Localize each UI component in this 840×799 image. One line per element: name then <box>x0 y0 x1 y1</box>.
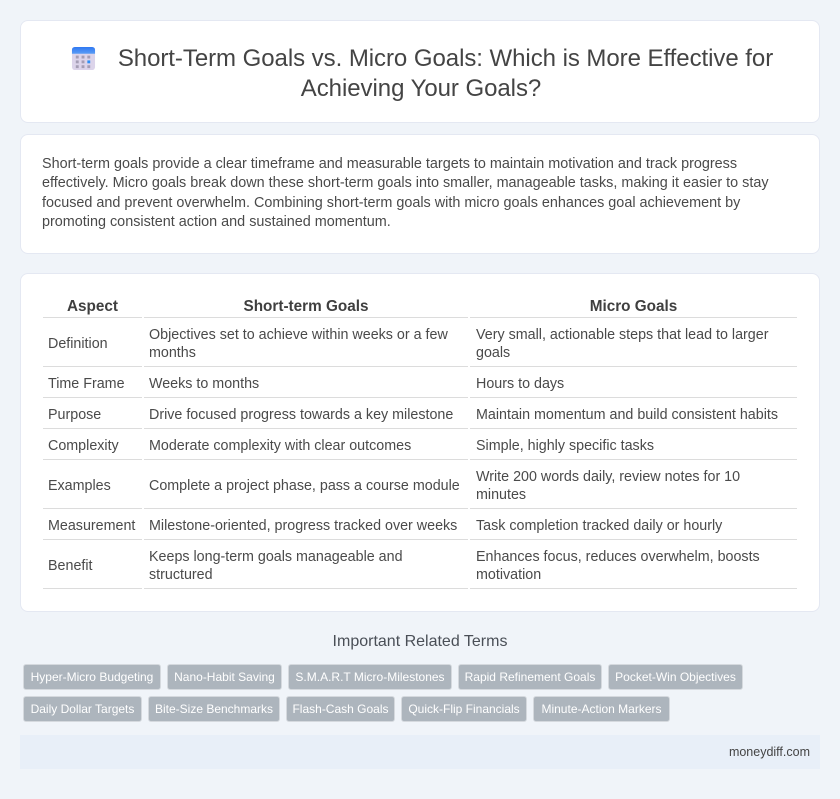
title: Short-Term Goals vs. Micro Goals: Which is More Effective for <box>118 45 773 72</box>
row: benefit: Keeps long-term goals manageable and <box>149 549 403 565</box>
tag: Pocket-Win Objectives <box>615 670 736 684</box>
tag <box>167 664 282 690</box>
row: definition: months <box>149 345 196 361</box>
tag <box>533 696 670 722</box>
row: definition: Very small, actionable steps that lead to larger <box>476 327 768 343</box>
table header <box>43 298 797 318</box>
row: time frame: Weeks to months <box>149 376 259 392</box>
tag: Quick-Flip Financials <box>408 702 520 716</box>
row: complexity: Moderate complexity with clear outcomes <box>149 438 411 454</box>
related term tags <box>23 664 743 722</box>
row: benefit: motivation <box>476 567 541 583</box>
tag: Bite-Size Benchmarks <box>155 702 273 716</box>
row: examples: minutes <box>476 487 526 503</box>
table header: Micro Goals <box>590 298 677 315</box>
row: purpose: Maintain momentum and build consistent habits <box>476 407 778 423</box>
intro text: effectively. Micro goals break down these short-term goals into smaller, manageable tasks, making it easier to stay <box>42 175 769 191</box>
title: Achieving Your Goals? <box>301 75 541 102</box>
row: purpose: Purpose <box>48 407 101 423</box>
row: examples: Examples <box>48 478 111 494</box>
tag: Rapid Refinement Goals <box>465 670 595 684</box>
tag: Minute-Action Markers <box>541 702 662 716</box>
tag <box>23 664 161 690</box>
row: benefit: structured <box>149 567 213 583</box>
panel: comparison table <box>20 273 820 612</box>
row: examples: Complete a project phase, pass a course module <box>149 478 460 494</box>
row: benefit: Benefit <box>48 558 93 574</box>
intro text: focused and prevent overwhelm. Combining short-term goals with micro goals enhances goal achievement by <box>42 195 740 211</box>
row: purpose: Drive focused progress towards a key milestone <box>149 407 453 423</box>
tag <box>23 696 142 722</box>
row: definition: Definition <box>48 336 108 352</box>
intro text: Short-term goals provide a clear timeframe and measurable targets to maintain motivation and track progress <box>42 156 737 172</box>
icon: calendar <box>72 47 96 70</box>
tag: Flash-Cash Goals <box>292 702 389 716</box>
intro text <box>42 156 769 230</box>
row: complexity <box>43 438 797 460</box>
heading: important related terms: Important Related Terms <box>333 633 507 650</box>
title <box>118 45 773 102</box>
tag: Hyper-Micro Budgeting <box>31 670 153 684</box>
row: time frame <box>43 376 797 398</box>
row: definition: goals <box>476 345 510 361</box>
row: complexity: Complexity <box>48 438 119 454</box>
header panel <box>20 20 820 123</box>
row: complexity: Simple, highly specific tasks <box>476 438 654 454</box>
row: examples: Write 200 words daily, review notes for 10 <box>476 469 740 485</box>
table header: Aspect <box>67 298 118 315</box>
tag <box>401 696 527 722</box>
row: measurement: Milestone-oriented, progress tracked over weeks <box>149 518 457 534</box>
row: definition: Objectives set to achieve within weeks or a few <box>149 327 448 343</box>
row: time frame: Time Frame <box>48 376 125 392</box>
footer bar <box>20 735 820 769</box>
tag: Nano-Habit Saving <box>174 670 275 684</box>
row: examples <box>43 469 797 509</box>
tag <box>288 664 452 690</box>
row: purpose <box>43 407 797 429</box>
tag <box>148 696 280 722</box>
row: benefit: Enhances focus, reduces overwhelm, boosts <box>476 549 760 565</box>
tag: Daily Dollar Targets <box>31 702 134 716</box>
row: definition <box>43 327 797 367</box>
tag <box>608 664 743 690</box>
row: measurement: Measurement <box>48 518 135 534</box>
tag <box>286 696 395 722</box>
row: measurement <box>43 518 797 540</box>
table header: Short-term Goals <box>244 298 368 315</box>
row: time frame: Hours to days <box>476 376 564 392</box>
intro text: promoting consistent action and sustained momentum. <box>42 214 391 230</box>
panel: introduction <box>20 134 820 254</box>
row: measurement: Task completion tracked daily or hourly <box>476 518 722 534</box>
tag: S.M.A.R.T Micro-Milestones <box>295 670 445 684</box>
tag <box>458 664 602 690</box>
row: benefit <box>43 549 797 589</box>
footer site name: moneydiff.com <box>729 745 810 759</box>
